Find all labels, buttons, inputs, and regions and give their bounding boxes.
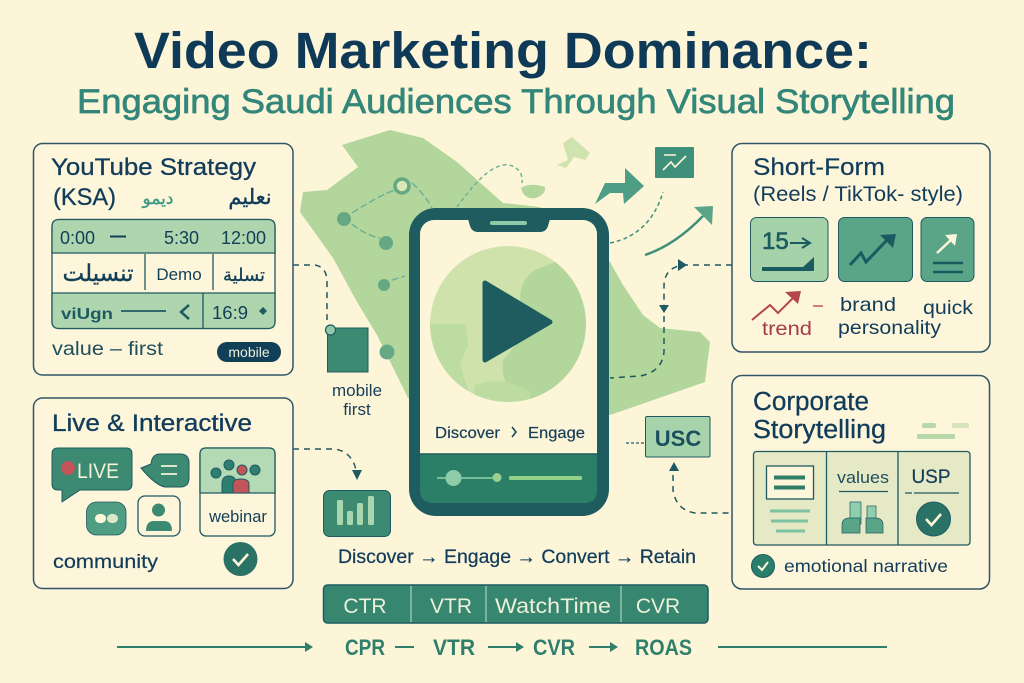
heading: Storytelling <box>753 416 886 444</box>
timeline table: تسلية <box>223 265 265 286</box>
tile: growth <box>838 218 912 282</box>
screen caption: Engage <box>528 425 585 442</box>
label: mobile first <box>332 381 382 419</box>
mobile pill: mobile <box>228 344 270 360</box>
badge: USC: USC <box>655 426 701 451</box>
icon: pill toggle <box>86 502 126 535</box>
panel: Short-Form <box>732 144 990 352</box>
icon: person <box>138 496 180 536</box>
funnel text: Discover → Engage → Convert → Retain <box>338 546 696 568</box>
community label: community <box>53 551 158 573</box>
values column <box>837 468 889 533</box>
webinar card: webinar <box>208 508 267 526</box>
KPI flow line <box>117 635 887 660</box>
icon: mobile first square <box>326 325 368 372</box>
timeline table: 0:00 <box>60 228 95 248</box>
metrics bar: CTR <box>343 595 387 618</box>
metrics bar: VTR <box>430 595 472 618</box>
heading: Live & Interactive <box>52 410 252 437</box>
heading: Corporate <box>753 388 869 416</box>
LIVE bubble <box>52 448 132 502</box>
USP column: USP <box>911 467 951 488</box>
timeline table: 16:9 <box>212 302 248 323</box>
globe behind play button <box>430 246 586 402</box>
tile: 15 seconds <box>750 218 828 282</box>
subtitle: Engaging Saudi Audiences Through Visual Storytelling <box>77 83 955 121</box>
player bar <box>420 454 597 503</box>
brand personality label <box>838 294 941 339</box>
icon: check <box>224 542 258 576</box>
icon: trend chart <box>655 147 694 178</box>
Arabic labels: نعليم <box>228 185 272 210</box>
label: mobile first: mobile <box>332 381 382 400</box>
panel: Corporate Storytelling <box>732 376 990 589</box>
panel: YouTube Strategy <box>34 144 293 375</box>
brand personality label: brand <box>840 294 896 316</box>
chat bubble <box>141 454 189 487</box>
USP column <box>905 467 959 536</box>
document icon <box>766 466 814 531</box>
panel: Live & Interactive <box>34 398 293 588</box>
connector: corporate to USC <box>669 462 732 513</box>
timeline table <box>52 220 275 328</box>
brand personality label: personality <box>838 317 941 339</box>
timeline table: 5:30 <box>164 228 199 248</box>
title: Video Marketing Dominance: <box>134 22 872 79</box>
arrow: growth block arrow <box>595 168 644 204</box>
webinar card <box>200 448 275 536</box>
KPI flow line: ROAS <box>635 635 692 660</box>
screen caption: Discover <box>435 425 501 442</box>
icon: analytics bars <box>324 490 390 536</box>
connector: Live to analytics <box>293 449 362 480</box>
heading: YouTube Strategy <box>51 154 257 181</box>
connector: YouTube to mobile first <box>293 265 327 320</box>
play button <box>485 283 550 360</box>
Arabic labels: ديمو <box>142 189 173 209</box>
metrics bar <box>324 585 708 623</box>
quick label: quick <box>923 298 974 319</box>
heading <box>753 154 963 206</box>
LIVE bubble: LIVE <box>77 460 119 483</box>
heading: Short-Form <box>753 154 885 181</box>
values column: values <box>837 468 889 487</box>
timeline table: Demo <box>156 265 202 284</box>
emotional narrative note: emotional narrative <box>784 556 948 576</box>
heading <box>51 154 257 211</box>
phone notch <box>468 219 550 232</box>
value first note: value – first <box>52 339 164 360</box>
tile: 15 seconds: 15 <box>762 228 789 255</box>
KPI flow line: VTR <box>433 635 475 660</box>
map of Saudi Arabia with route nodes <box>300 130 710 415</box>
screen caption <box>435 425 585 442</box>
decorative dashes <box>917 423 969 439</box>
heading: (KSA) <box>53 184 116 211</box>
Arabic labels <box>142 185 272 210</box>
metrics bar: CVR <box>636 595 680 618</box>
emotional narrative note <box>752 554 948 578</box>
values table <box>754 452 970 545</box>
metrics bar: WatchTime <box>495 595 611 618</box>
timeline table: تنسيلت <box>62 261 134 287</box>
arrow: rising curve <box>645 206 713 255</box>
trend arrow and label <box>752 291 823 340</box>
heading <box>753 388 886 444</box>
trend arrow and label: trend <box>762 319 812 340</box>
KPI flow line: CPR <box>345 635 385 660</box>
timeline table: viUgn <box>61 306 113 323</box>
timeline table: 12:00 <box>221 228 266 248</box>
label: mobile first: first <box>343 400 371 419</box>
connector: short form to phone <box>610 259 732 378</box>
KPI flow line: CVR <box>533 635 575 660</box>
heading: (Reels / TikTok- style) <box>753 183 963 206</box>
badge: USC <box>626 416 710 457</box>
connector: phone to trend <box>610 192 663 243</box>
phone with play screen <box>409 208 609 516</box>
mobile pill <box>217 342 281 362</box>
tile: quick <box>921 218 974 282</box>
